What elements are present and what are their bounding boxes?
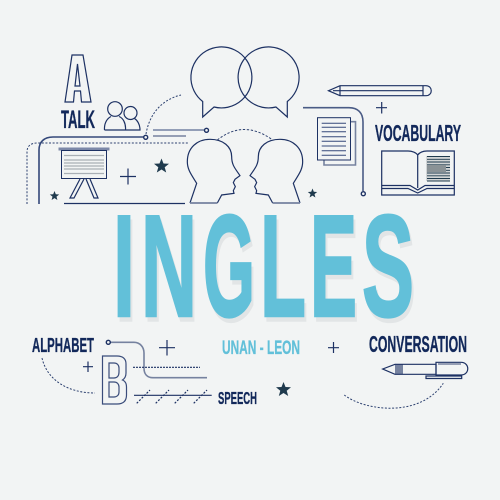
icon: presentation board <box>58 148 110 198</box>
title: INGLES: I <box>113 185 135 347</box>
title: INGLES shadow: I <box>115 190 137 352</box>
letter B <box>102 356 126 404</box>
label: speech: SPEECH <box>218 388 257 408</box>
icon: open book <box>382 151 454 195</box>
icon: facing heads <box>187 129 303 203</box>
title: INGLES shadow: L <box>262 190 308 352</box>
title: INGLES shadow: N <box>143 190 199 352</box>
star <box>276 382 291 396</box>
plus <box>83 362 93 372</box>
plus <box>328 342 339 353</box>
title: INGLES <box>113 185 414 347</box>
plus <box>159 340 175 356</box>
title: INGLES shadow: E <box>312 190 359 352</box>
line with slashes <box>134 390 212 403</box>
letter A <box>65 55 91 102</box>
label: unan - leon: UNAN - LEON <box>222 338 300 359</box>
connector lines: top left <box>27 95 208 204</box>
star <box>154 158 169 172</box>
title: INGLES: L <box>260 185 306 347</box>
title: INGLES: N <box>141 185 197 347</box>
icon: pen <box>383 362 468 378</box>
icon: people <box>104 102 140 130</box>
icon: documents <box>318 118 356 165</box>
label: talk: TALK <box>61 106 95 134</box>
connector line: right <box>303 108 365 196</box>
connector line: alphabet <box>106 340 207 378</box>
baseline <box>64 202 185 204</box>
title: INGLES shadow: G <box>205 190 257 352</box>
dotted arc <box>344 383 443 408</box>
title: INGLES: G <box>203 185 255 347</box>
star <box>308 188 317 198</box>
title: INGLES: E <box>310 185 357 347</box>
title: INGLES shadow: S <box>364 190 416 352</box>
icon: pencil <box>328 86 431 96</box>
icon: speech bubbles <box>191 47 299 117</box>
plus <box>376 102 387 114</box>
title: INGLES shadow <box>115 190 416 352</box>
title: INGLES: S <box>362 185 414 347</box>
label: alphabet: ALPHABET <box>32 334 94 357</box>
dotted arc <box>42 358 95 393</box>
dashed line <box>133 366 200 368</box>
plus <box>120 168 136 184</box>
star <box>50 191 59 200</box>
